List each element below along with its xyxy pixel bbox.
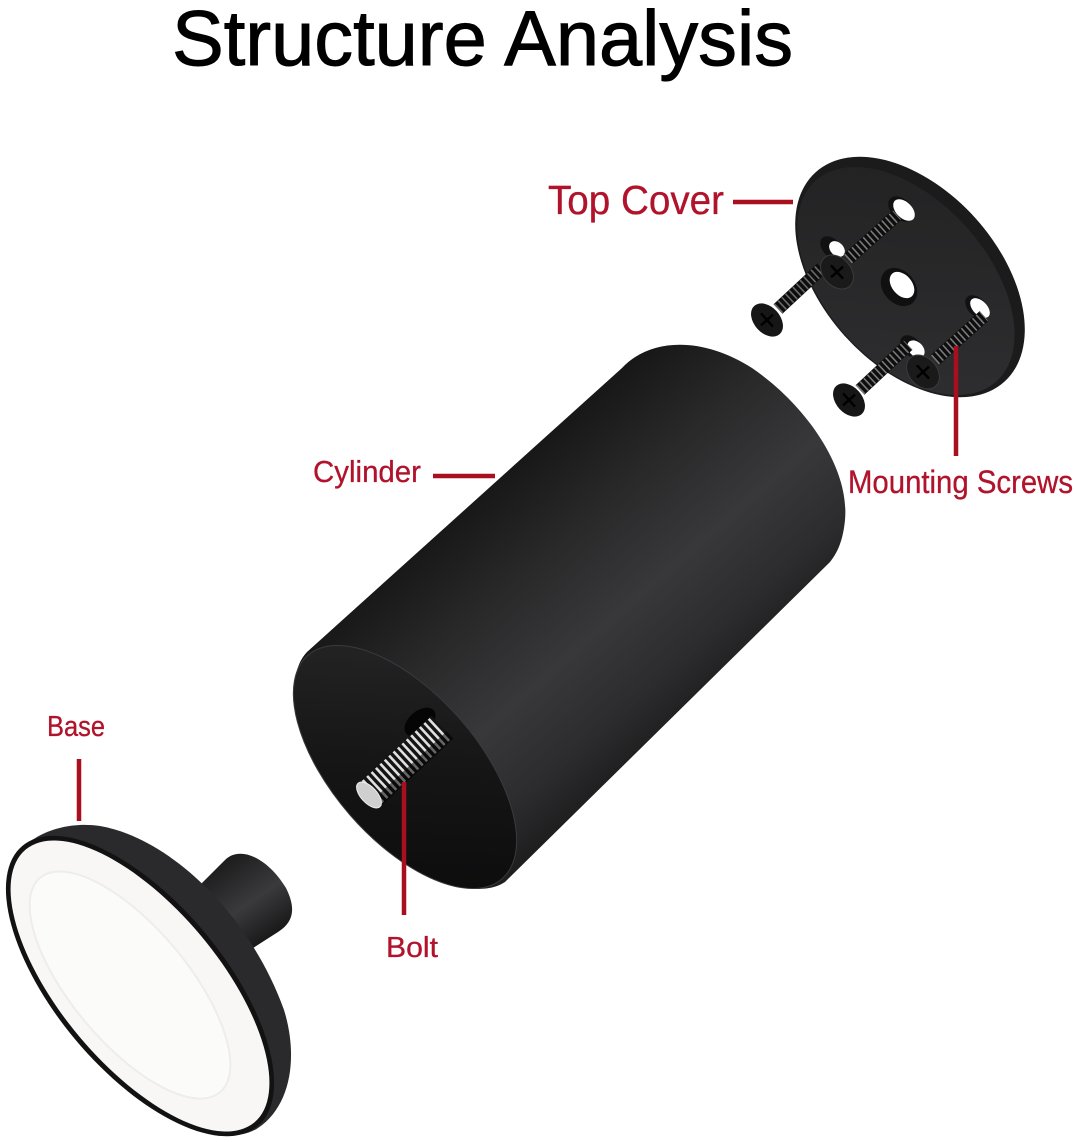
label: bolt: Bolt: [386, 932, 438, 964]
cylinder inner opening: [253, 607, 557, 927]
cylinder body: [295, 345, 845, 889]
label: base: [47, 711, 105, 821]
base white pad: [0, 799, 315, 1142]
screw 2: [814, 215, 897, 295]
bolt: [352, 727, 450, 812]
centre hole: [873, 261, 925, 313]
mounting holes: [883, 191, 919, 227]
label: base: Base: [47, 711, 105, 743]
mounting screws: [745, 215, 984, 423]
base rim: [10, 825, 291, 1136]
base rim black edge: [0, 792, 322, 1142]
base: [0, 792, 322, 1142]
screw 3: [827, 345, 908, 423]
base pad inner ring: [0, 840, 264, 1130]
screw 1: [745, 268, 822, 343]
label: top cover: Top Cover: [548, 177, 724, 223]
base knob: [190, 854, 292, 950]
top cover disc: [750, 113, 1070, 441]
screw 4: [900, 316, 984, 395]
bolt socket: [399, 702, 441, 742]
label: cylinder: Cylinder: [313, 454, 421, 489]
cylinder: [253, 345, 845, 927]
